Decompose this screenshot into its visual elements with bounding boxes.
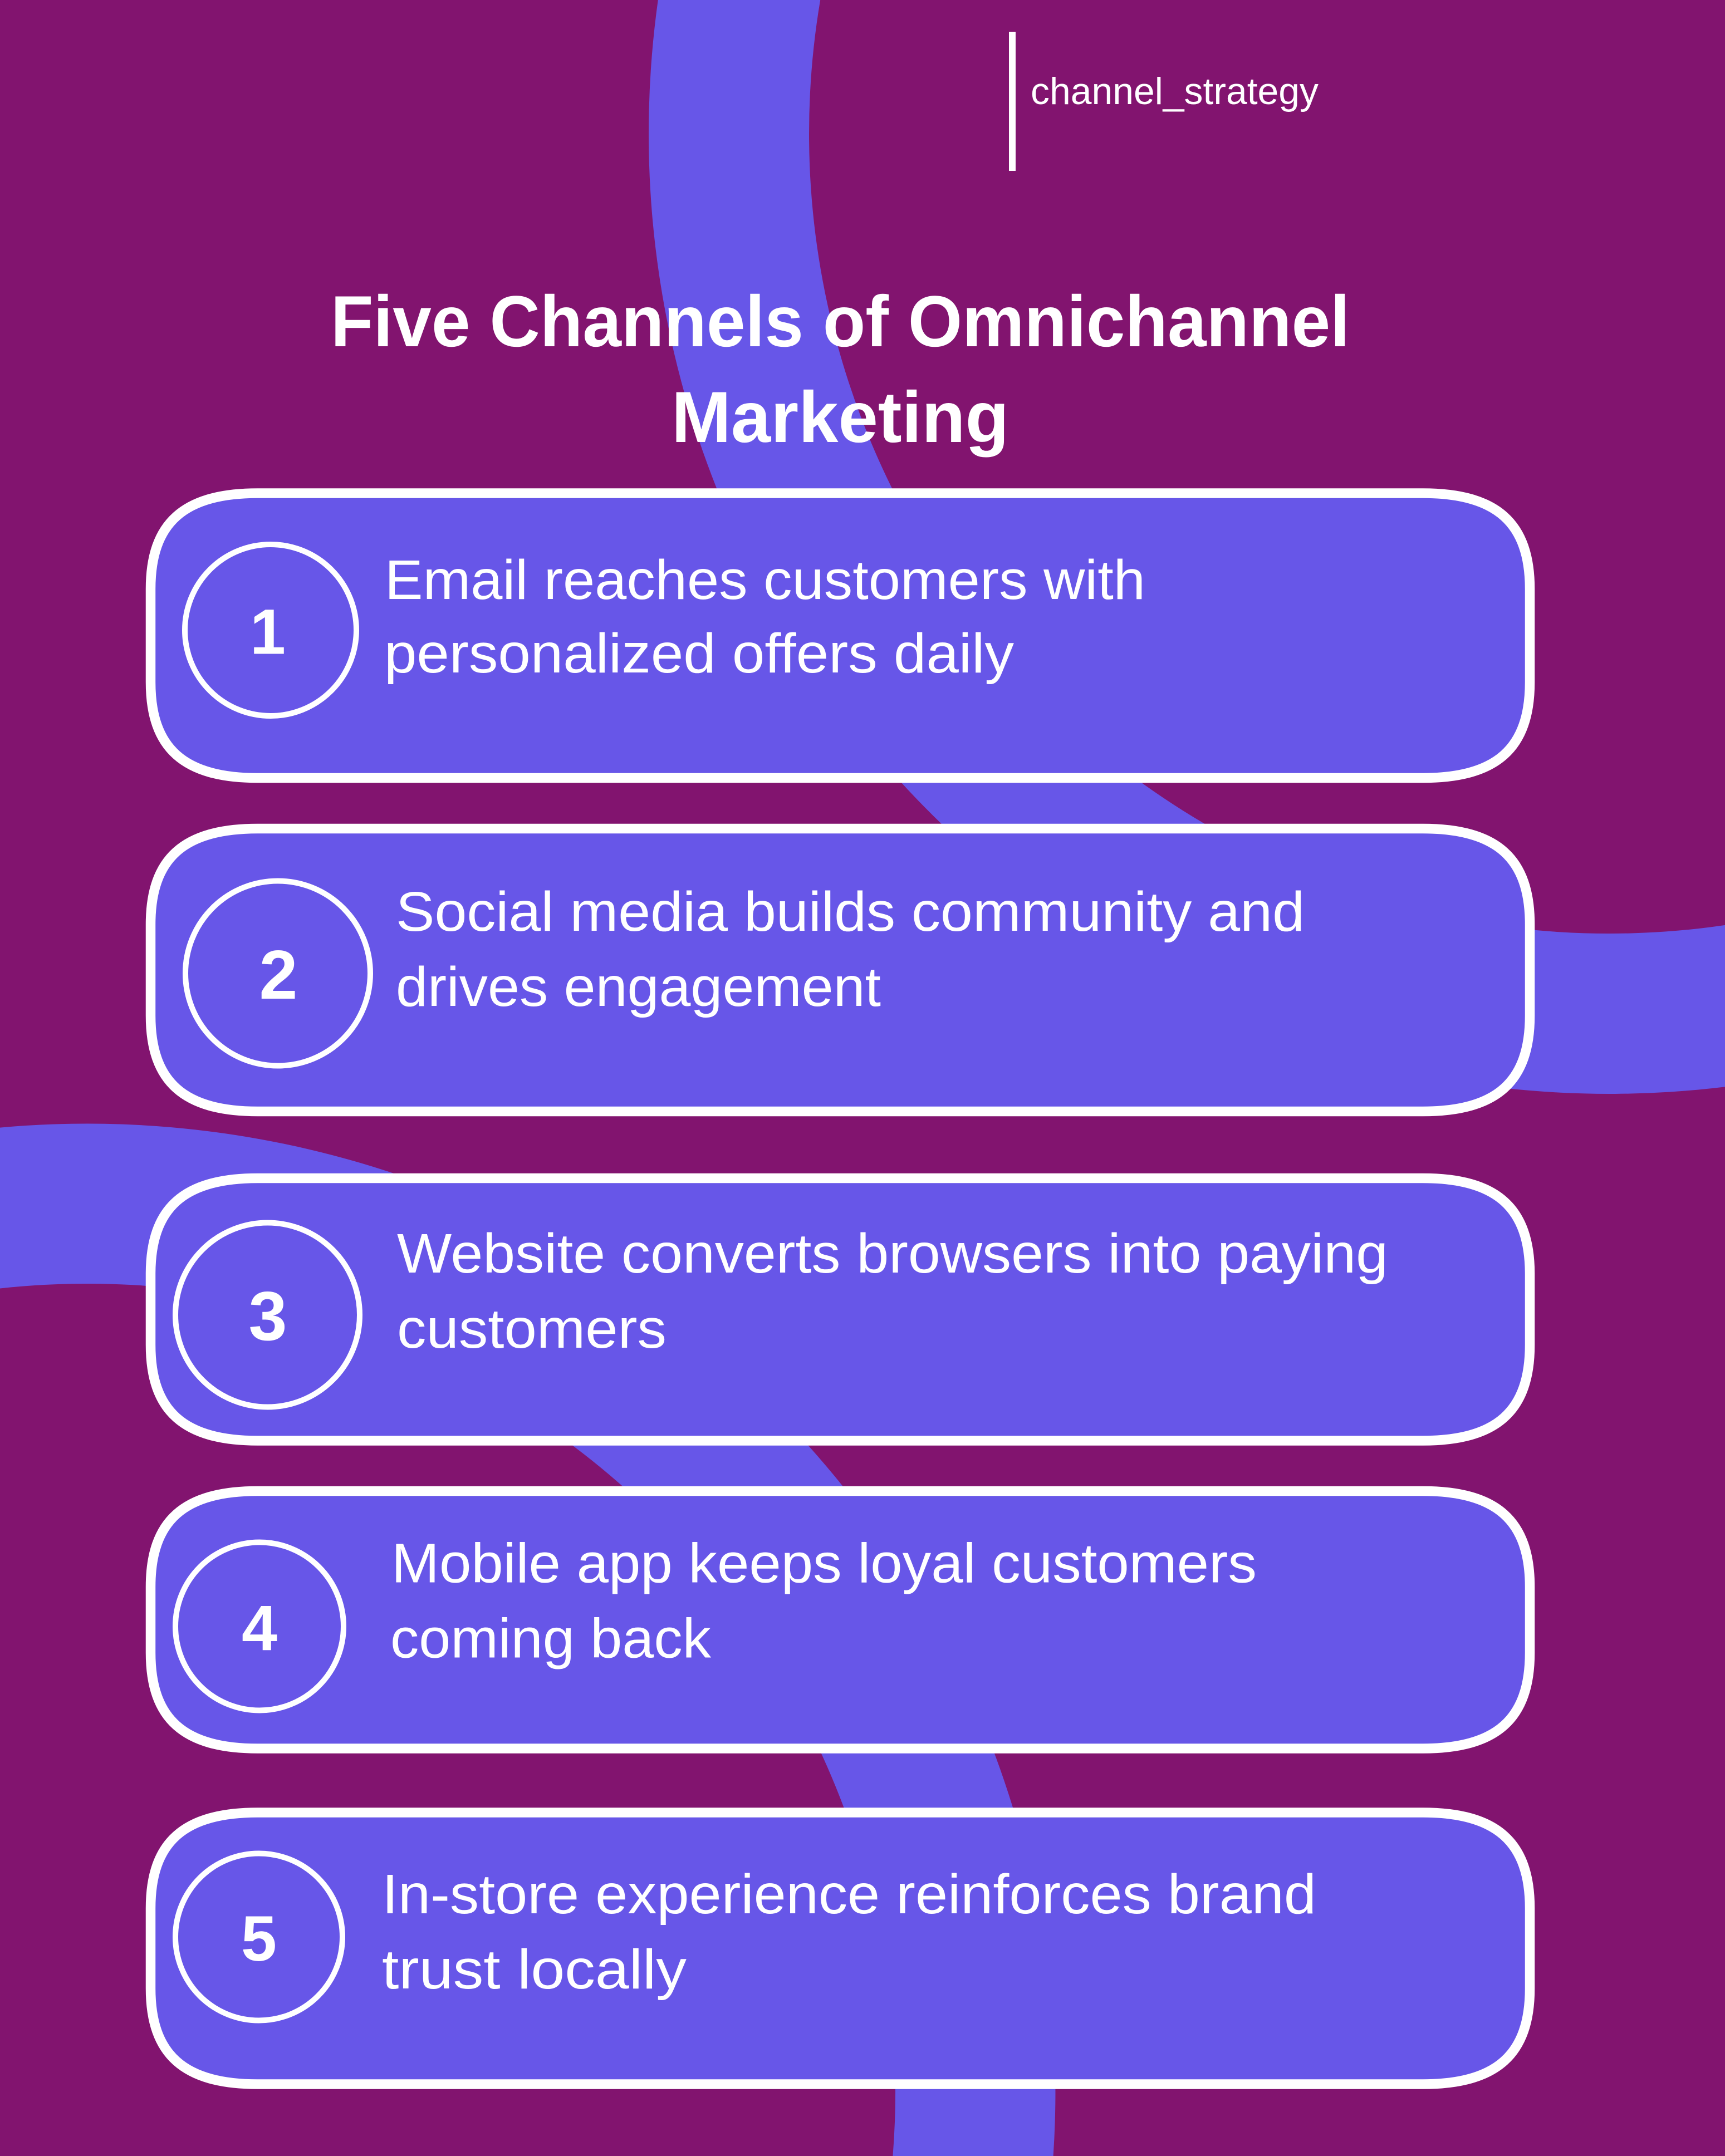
- card 3 background: [150, 1178, 1530, 1441]
- panel: step 5 in-store: [150, 1813, 1530, 2084]
- card 1 background: [150, 493, 1530, 778]
- text: mobile app: coming back: [390, 1608, 712, 1670]
- text: website: [397, 1222, 1388, 1360]
- text: mobile app: Mobile app keeps loyal customers: [391, 1532, 1257, 1594]
- text: social media: drives engagement: [396, 956, 881, 1018]
- card 5 background: [150, 1813, 1530, 2084]
- text: website: customers: [397, 1298, 667, 1360]
- title: Marketing: [672, 376, 1009, 458]
- number badge 3: [175, 1222, 360, 1407]
- text: in-store: In-store experience reinforces brand: [382, 1863, 1316, 1926]
- text: website: Website converts browsers into paying: [397, 1222, 1388, 1285]
- text: social media: Social media builds community and: [396, 881, 1305, 943]
- number badge 4: [175, 1542, 344, 1710]
- card 4 background: [150, 1491, 1530, 1749]
- panel: step 1 email: [150, 493, 1530, 778]
- handle text: channel_strategy: [1031, 70, 1319, 112]
- number badge 4: 4: [242, 1593, 277, 1664]
- handle divider bar: [1009, 32, 1016, 171]
- text: email: [384, 549, 1145, 685]
- text: in-store: trust locally: [382, 1938, 687, 2001]
- decorative arc: top right: [649, 0, 1725, 1094]
- number badge 5: [175, 1854, 342, 2021]
- title: [331, 281, 1350, 458]
- card 2 background: [150, 828, 1530, 1111]
- number badge 2: [185, 881, 370, 1065]
- panel: step 3 website: [150, 1178, 1530, 1441]
- number badge 5: 5: [241, 1903, 277, 1975]
- title: Five Channels of Omnichannel: [331, 281, 1350, 362]
- text: email: personalized offers daily: [384, 622, 1014, 685]
- panel: step 4 mobile app: [150, 1491, 1530, 1749]
- text: mobile app: [390, 1532, 1257, 1670]
- number badge 1: 1: [250, 597, 286, 668]
- text: email: Email reaches customers with: [385, 549, 1145, 611]
- number badge 2: 2: [259, 937, 297, 1014]
- text: in-store: [382, 1863, 1316, 2001]
- number badge 3: 3: [249, 1278, 287, 1355]
- text: social media: [396, 881, 1305, 1018]
- panel: step 2 social media: [150, 828, 1530, 1111]
- number badge 1: [185, 544, 356, 716]
- decorative arc: bottom left: [0, 1123, 1055, 2156]
